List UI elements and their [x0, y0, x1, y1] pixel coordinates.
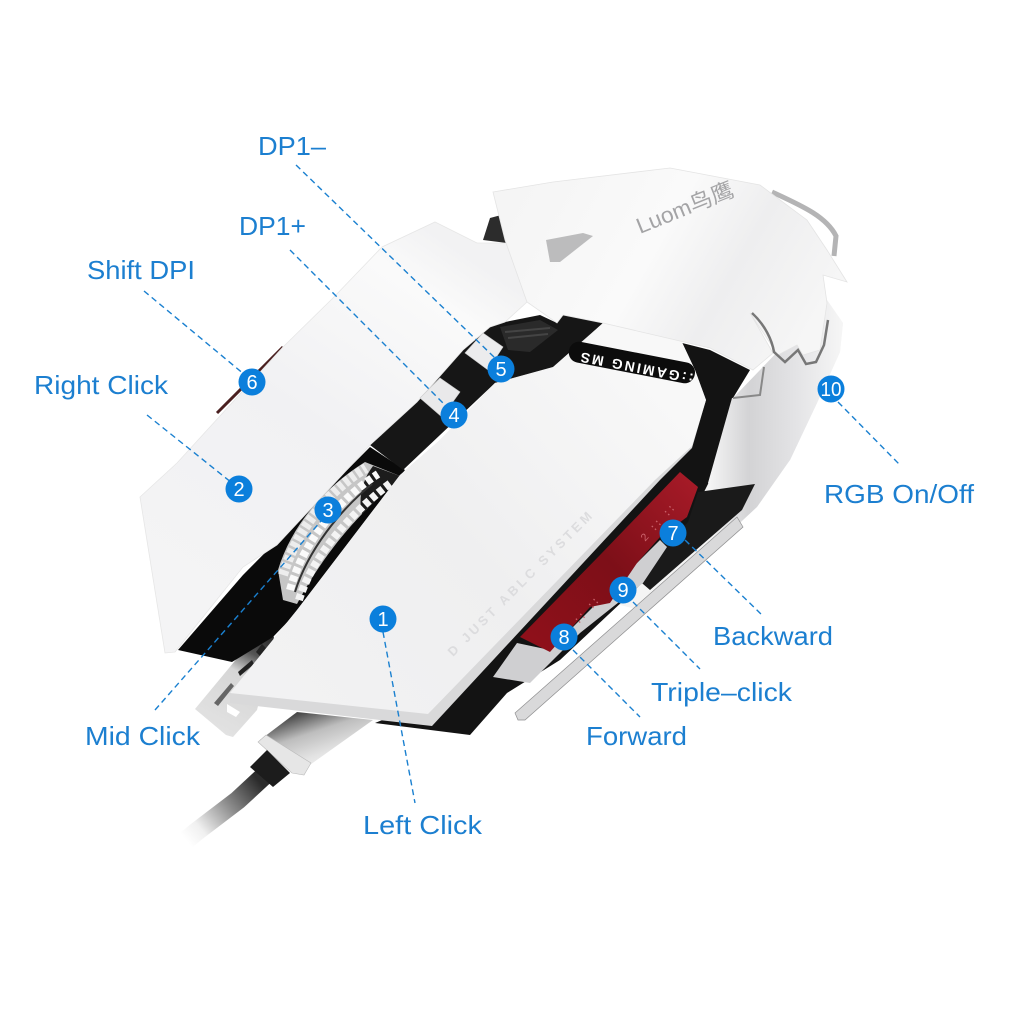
callout: Triple-click: Triple–click	[651, 677, 793, 707]
callout: Forward: Forward	[586, 721, 687, 751]
callout: DP1+: DP1+	[239, 211, 306, 241]
callout: DP1-: DP1–	[258, 131, 327, 161]
callout: Backward	[685, 540, 833, 651]
DPI button minus	[465, 333, 503, 370]
center black strip	[370, 315, 603, 470]
side rod	[515, 517, 743, 720]
badge 10: 10	[820, 379, 842, 401]
badge 7: 7	[667, 523, 679, 545]
badge 9	[610, 576, 636, 604]
callout: Backward: Backward	[713, 621, 833, 651]
mouse illustration	[140, 168, 847, 852]
badge 9: 9	[617, 580, 629, 602]
callout: Shift DPI: Shift DPI	[87, 255, 195, 285]
badge 8	[550, 624, 578, 650]
black tail plate	[636, 484, 755, 590]
cable	[172, 775, 265, 852]
callout: Forward	[573, 650, 687, 751]
chrome edge of silver panel	[733, 367, 764, 398]
black rear underside	[178, 447, 405, 662]
rear chrome rim	[772, 192, 836, 256]
badge 1: 1	[377, 609, 389, 631]
callout: Left Click	[363, 632, 483, 840]
callout: Right Click: Right Click	[34, 370, 169, 400]
callout: Mid Click: Mid Click	[85, 721, 201, 751]
badge 4: 4	[448, 405, 460, 427]
back silver body	[600, 300, 843, 610]
badge 5: 5	[495, 359, 507, 381]
badge 5	[488, 356, 514, 382]
badge 2: 2	[233, 479, 245, 501]
badge 7	[660, 520, 686, 546]
DPI button plus	[420, 378, 460, 417]
callout: Right Click	[34, 370, 232, 483]
badge 4	[440, 402, 468, 428]
callout: RGB On/Off: RGB On/Off	[824, 479, 975, 509]
callout: Triple-click	[633, 602, 793, 707]
badge 6: 6	[246, 372, 258, 394]
shift DPI dark side line	[217, 347, 283, 413]
badge 10	[818, 376, 844, 402]
left mouse button panel	[230, 323, 706, 726]
badge 6	[238, 368, 266, 396]
gaming badge: ::GAMING MS	[578, 349, 695, 387]
badge 3	[314, 496, 342, 524]
callout: Mid Click	[85, 520, 322, 751]
callout: DP1-	[258, 131, 495, 358]
left mouse button panel: D JUST ABLC SYSTEM	[445, 507, 597, 659]
silver lower plate	[493, 540, 667, 683]
badge 8: 8	[558, 627, 570, 649]
red side buttons	[520, 472, 698, 652]
metal tab	[195, 627, 274, 737]
badge 1	[370, 606, 396, 632]
logo: Luom鸟鹰	[633, 177, 737, 239]
red side buttons: 2 :: ::	[639, 502, 679, 545]
cable connector	[250, 712, 373, 787]
callout: Left Click: Left Click	[363, 810, 483, 840]
red side buttons: :: ::	[572, 595, 603, 628]
rear gap	[483, 214, 507, 243]
callout: DP1+	[239, 211, 445, 405]
chrome slit under shell	[752, 313, 828, 364]
dark side cavity	[375, 323, 750, 735]
scroll wheel	[278, 462, 400, 604]
right mouse button panel	[140, 222, 527, 653]
badge 3: 3	[322, 500, 334, 522]
badge 2	[226, 476, 252, 502]
silver side panel	[708, 300, 843, 483]
callout: RGB On/Off	[824, 402, 975, 509]
callout: Shift DPI	[87, 255, 245, 375]
top shell	[493, 168, 847, 370]
